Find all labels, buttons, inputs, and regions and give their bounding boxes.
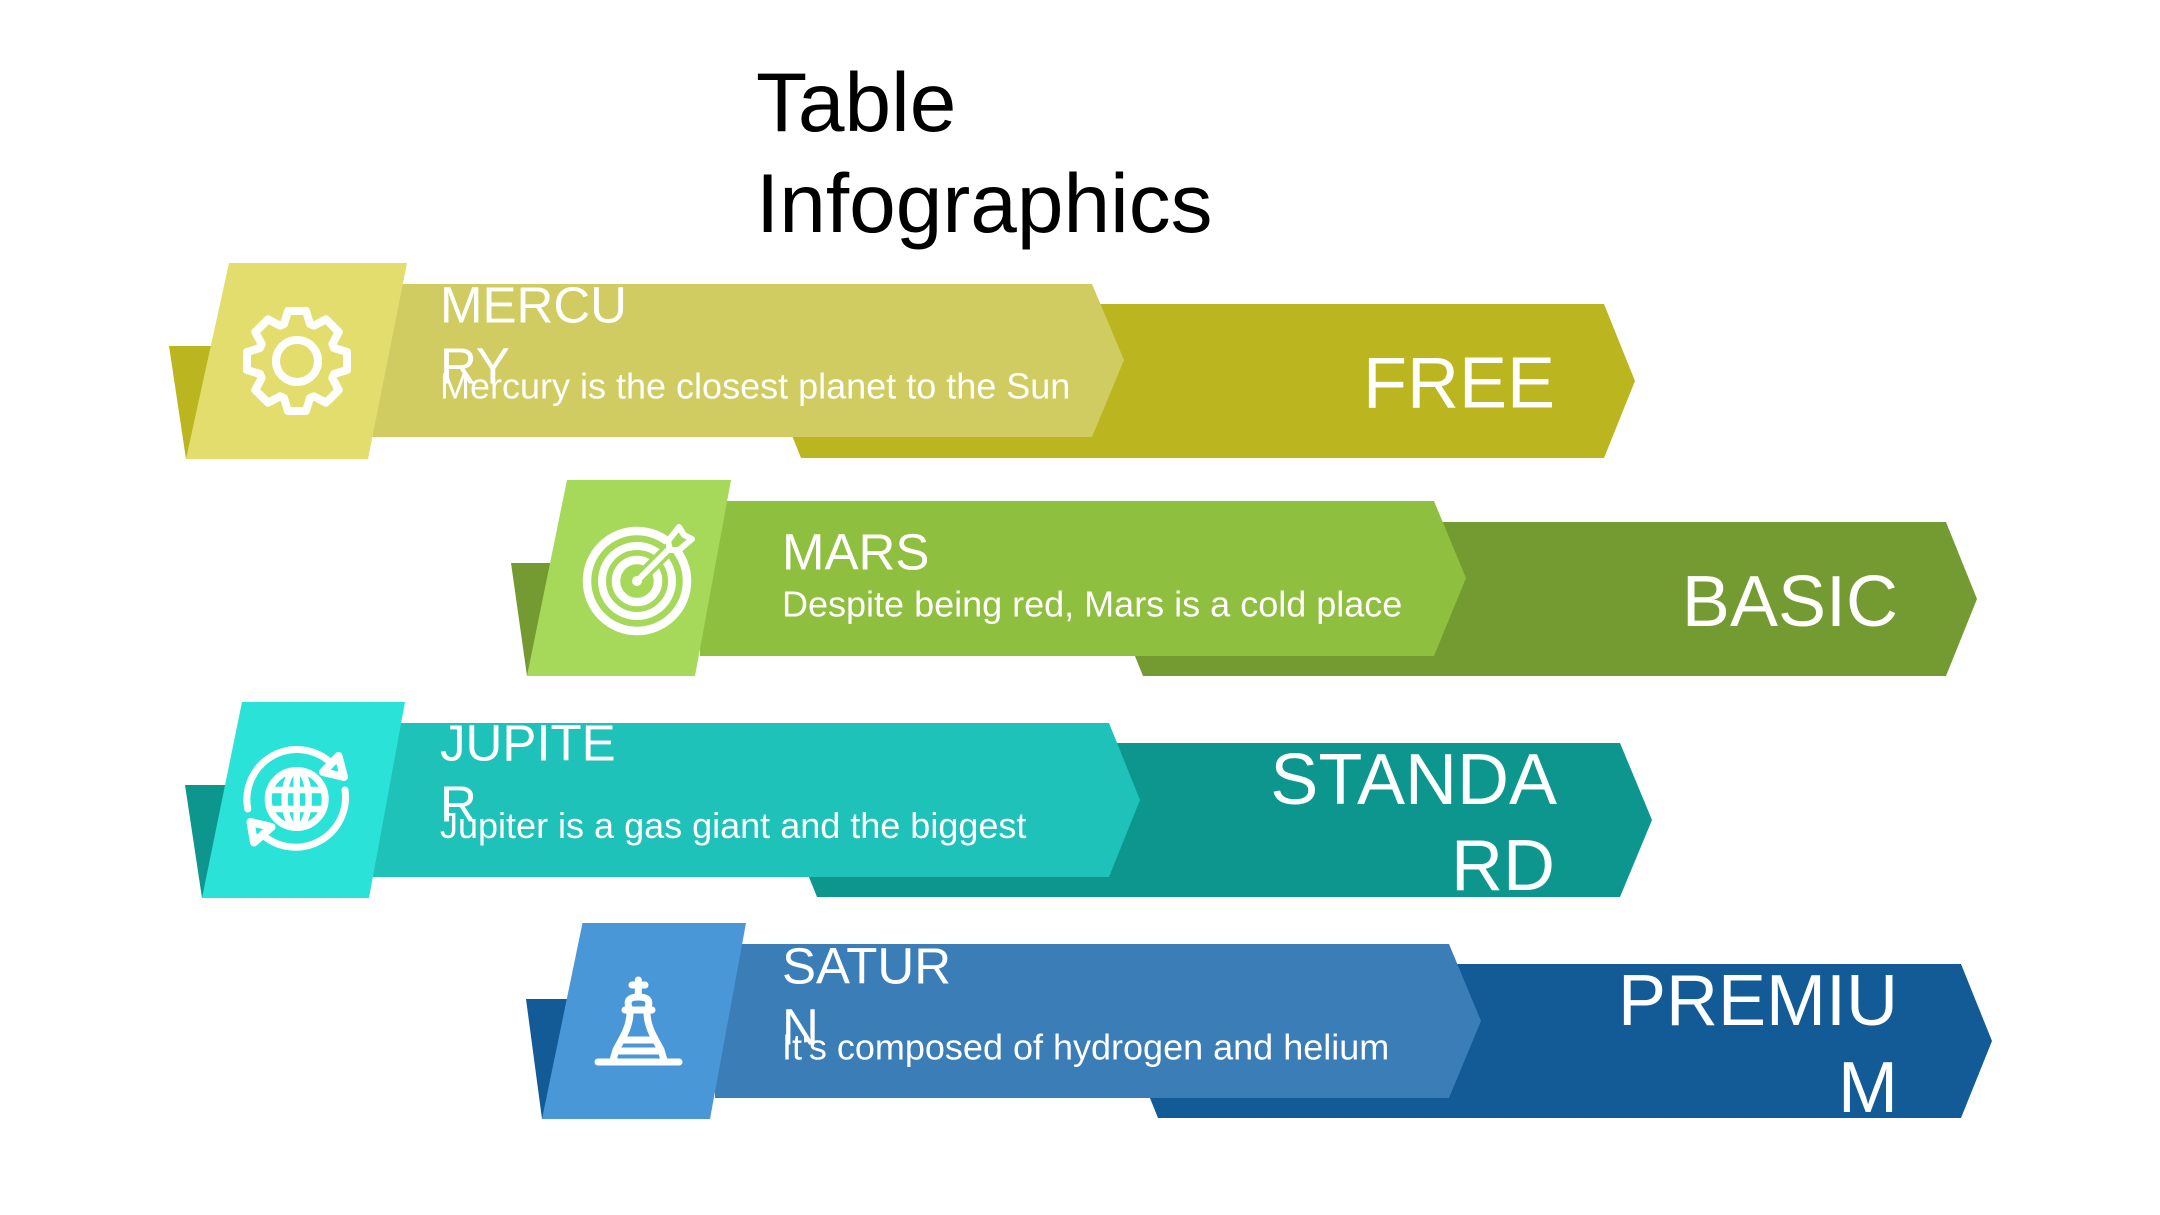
- plan label: standard: STANDA: [1270, 740, 1557, 820]
- panel: standard plan row: [185, 702, 1652, 906]
- heading: jupiter: R: [440, 776, 477, 832]
- plan label: standard: RD: [1451, 826, 1555, 906]
- back arrow: free: [770, 304, 1635, 458]
- fold triangle: basic: [511, 563, 600, 676]
- plan label: standard: [1270, 740, 1557, 906]
- heading: saturn: N: [782, 998, 819, 1056]
- heading: saturn: SATUR: [782, 938, 951, 994]
- back arrow: premium: [1127, 964, 1992, 1118]
- heading: saturn: [782, 938, 951, 1056]
- icon tile: saturn: [542, 923, 746, 1119]
- title: [756, 55, 1213, 250]
- back arrow: standard: [786, 743, 1652, 897]
- plan label: basic: BASIC: [1682, 562, 1898, 642]
- plan label: premium: [1618, 961, 1898, 1128]
- heading: jupiter: [440, 714, 616, 832]
- plan label: premium: PREMIU: [1618, 961, 1898, 1041]
- heading: mercury: RY: [440, 338, 510, 394]
- panel: premium plan row: [526, 923, 1992, 1128]
- plan label: free: FREE: [1363, 344, 1555, 424]
- icon: chess king: [598, 980, 679, 1062]
- icon tile: jupiter: [202, 702, 405, 898]
- front arrow: mars: [700, 501, 1466, 656]
- heading: mars: MARS: [782, 524, 929, 580]
- icon: target: [587, 527, 692, 631]
- front arrow: mercury: [360, 284, 1124, 437]
- fold triangle: premium: [526, 999, 615, 1119]
- heading: mercury: [440, 276, 627, 394]
- description: jupiter: Jupiter is a gas giant and the biggest: [440, 805, 1026, 846]
- heading: jupiter: JUPITE: [440, 714, 616, 772]
- icon tile: mars: [527, 480, 731, 676]
- panel: free plan row: [169, 263, 1635, 459]
- front arrow: saturn: [715, 944, 1481, 1098]
- front arrow: jupiter: [370, 723, 1140, 877]
- icon: gear: [247, 311, 347, 411]
- icon tile: mercury: [186, 263, 407, 459]
- title: Infographics: [756, 156, 1213, 250]
- description: mars: Despite being red, Mars is a cold place: [782, 584, 1402, 624]
- plan label: premium: M: [1838, 1048, 1898, 1128]
- description: mercury: Mercury is the closest planet to the Sun: [440, 366, 1070, 406]
- panel: basic plan row: [511, 480, 1977, 676]
- fold triangle: free: [169, 346, 260, 459]
- back arrow: basic: [1112, 522, 1977, 676]
- icon: globe with arrows: [247, 750, 346, 847]
- fold triangle: standard: [185, 785, 275, 898]
- description: saturn: It's composed of hydrogen and helium: [782, 1026, 1389, 1068]
- heading: mercury: MERCU: [440, 276, 627, 334]
- title: Table: [756, 55, 956, 149]
